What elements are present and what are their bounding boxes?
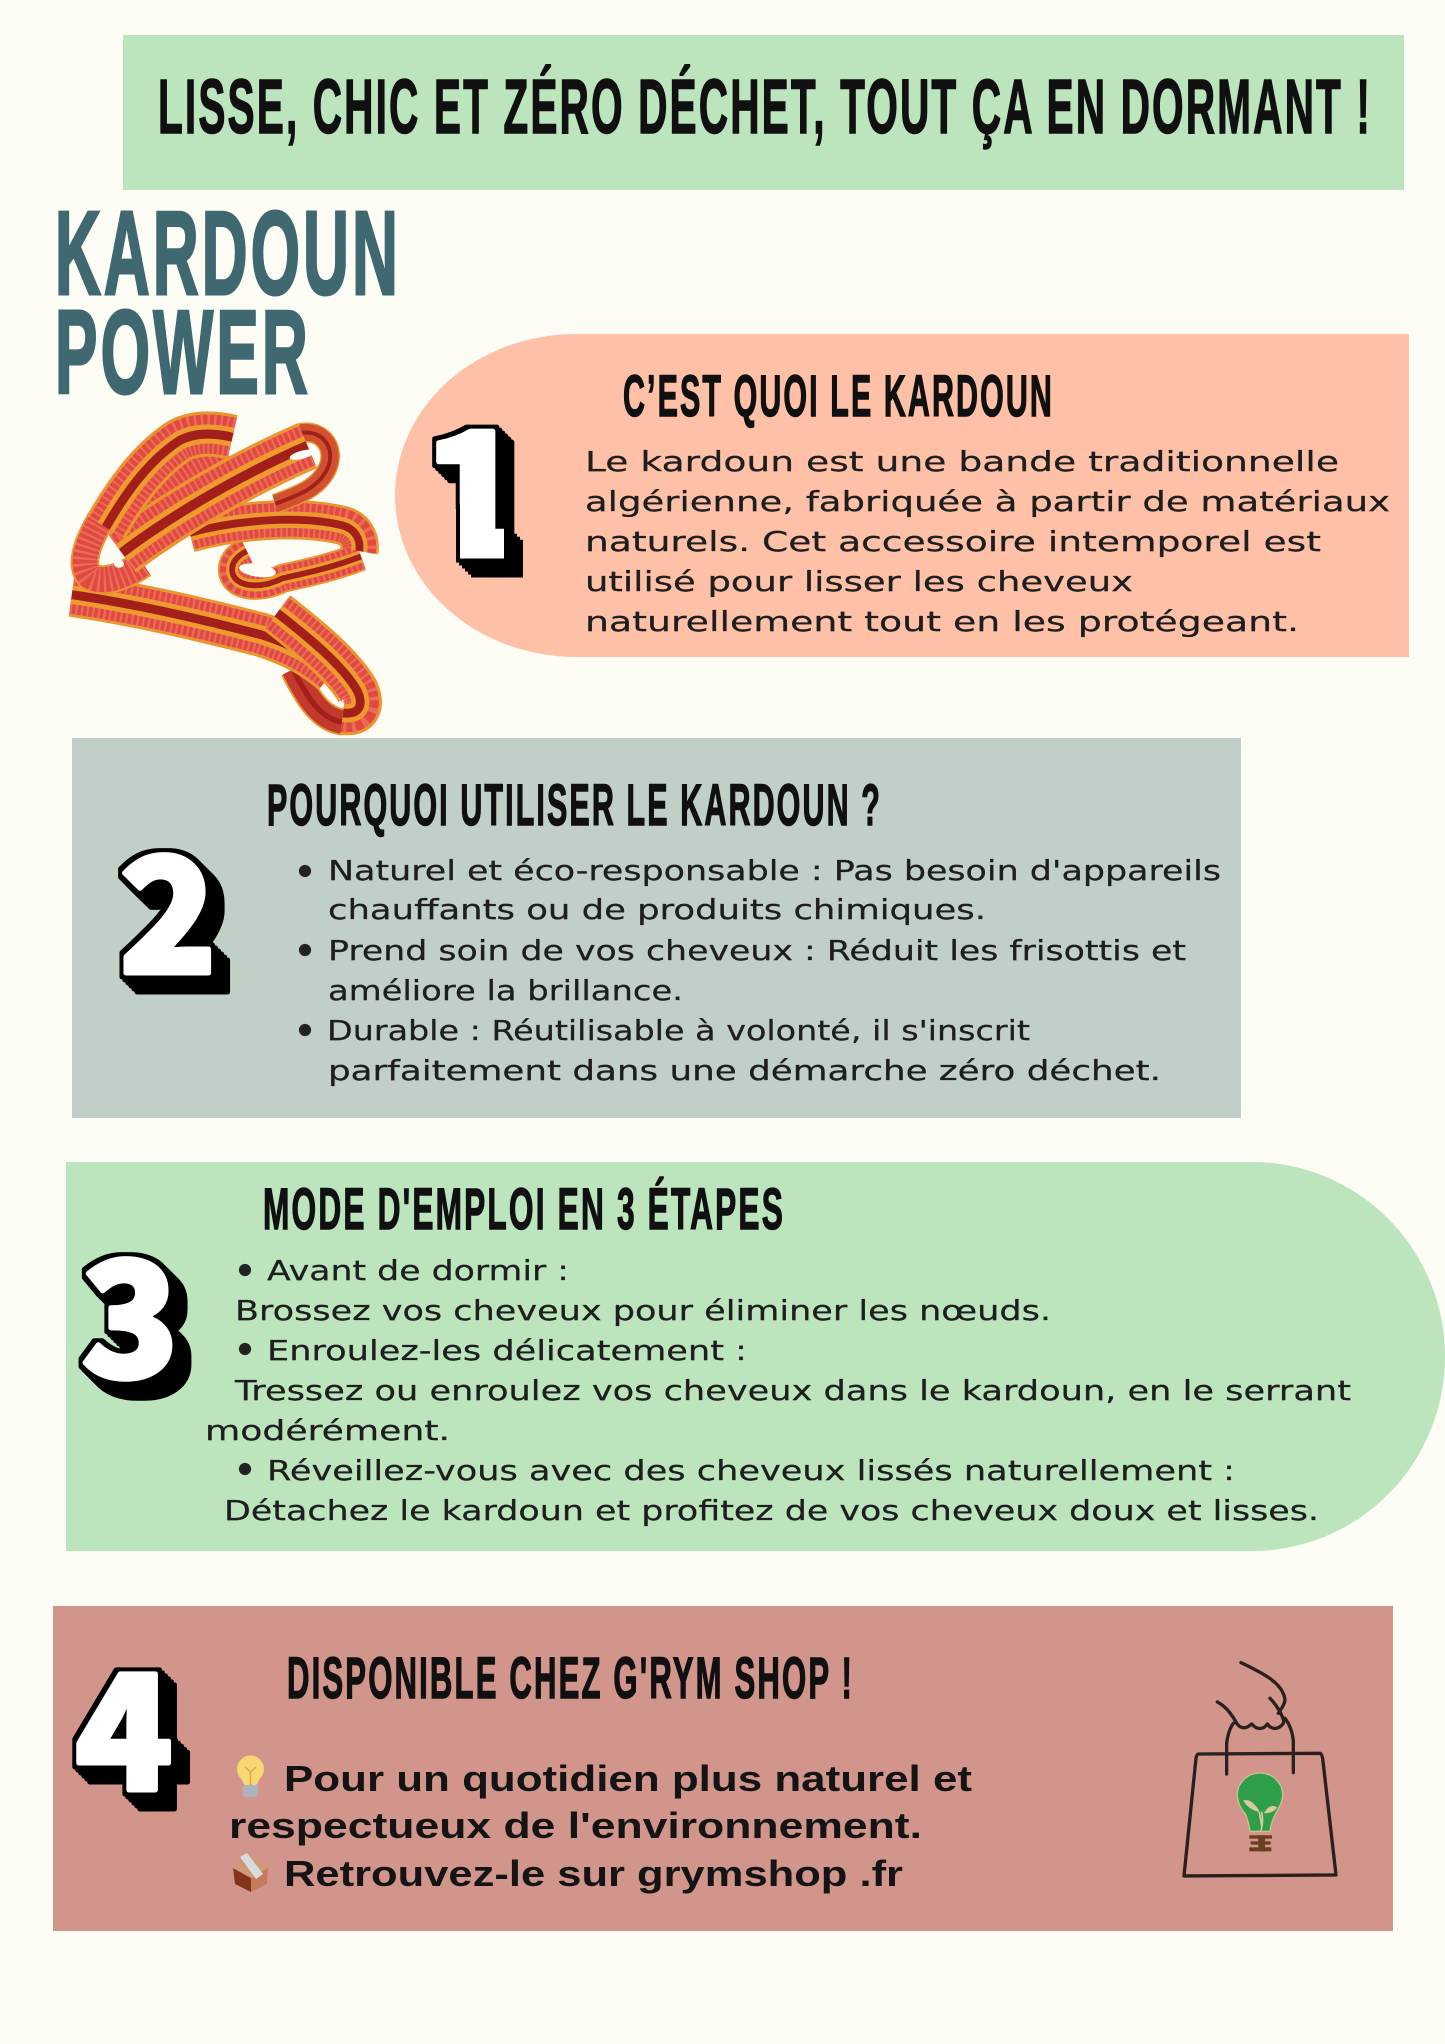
bullet list 2 [299, 854, 1221, 1087]
steps text: Détachez le kardoun et profitez de vos cheveux doux et lisses. [224, 1494, 1319, 1527]
body text 1: utilisé pour lisser les cheveux [585, 565, 1133, 598]
shop message: respectueux de l'environnement. [229, 1805, 922, 1846]
main title: KARDOUN [55, 187, 401, 320]
bullet list 2: chauffants ou de produits chimiques. [328, 893, 986, 926]
body text 1: Le kardoun est une bande traditionnelle [585, 445, 1339, 478]
heading 3: MODE D'EMPLOI EN 3 ÉTAPES [263, 1177, 785, 1242]
shop message: Retrouvez-le sur grymshop .fr [284, 1853, 903, 1894]
icon: shopping bag with hand and eco light bulb [1184, 1663, 1336, 1876]
body text 1 [585, 445, 1390, 638]
shop message [229, 1758, 972, 1894]
steps text: Enroulez-les délicatement : [267, 1334, 747, 1367]
bullet list 2: Naturel et éco-responsable : Pas besoin d'appareils [328, 854, 1221, 887]
heading 2: POURQUOI UTILISER LE KARDOUN ? [267, 773, 882, 838]
panel 2: why use kardoun [72, 738, 1241, 1118]
number 4: 4 [75, 1605, 173, 1837]
number 3: 3 [81, 1192, 179, 1424]
steps text: Réveillez-vous avec des cheveux lissés naturellement : [267, 1454, 1235, 1487]
heading 1: C’EST QUOI LE KARDOUN [623, 364, 1054, 429]
bullet list 2: Prend soin de vos cheveux : Réduit les frisottis et [328, 934, 1186, 967]
main title [55, 187, 401, 419]
steps text: Tressez ou enroulez vos cheveux dans le kardoun, en le serrant [234, 1374, 1351, 1407]
body text 1: algérienne, fabriquée à partir de matériaux [585, 485, 1390, 518]
main title: POWER [55, 286, 311, 419]
heading 4: DISPONIBLE CHEZ G'RYM SHOP ! [287, 1646, 854, 1711]
panel 1: what is kardoun [395, 334, 1409, 657]
steps text: Brossez vos cheveux pour éliminer les nœuds. [235, 1294, 1051, 1327]
number 1: 1 [422, 356, 526, 606]
kardoun ribbon illustration [72, 432, 361, 722]
number 2: 2 [119, 788, 217, 1020]
body text 1: naturels. Cet accessoire intemporel est [585, 525, 1321, 558]
shop message: Pour un quotidien plus naturel et [284, 1758, 972, 1799]
steps text: modérément. [205, 1414, 450, 1447]
steps text: Avant de dormir : [267, 1254, 569, 1287]
body text 1: naturellement tout en les protégeant. [585, 605, 1299, 638]
panel 3: how to use [66, 1162, 1445, 1551]
bullet list 2: parfaitement dans une démarche zéro déchet. [328, 1054, 1161, 1087]
top banner [123, 35, 1404, 190]
icon: light bulb emoji [237, 1756, 264, 1797]
bullet list 2: Durable : Réutilisable à volonté, il s'inscrit [327, 1014, 1030, 1047]
steps text [205, 1254, 1351, 1527]
bullet list 2: améliore la brillance. [328, 974, 683, 1007]
icon: package emoji [233, 1853, 268, 1892]
panel 4: available at G'RYM shop [53, 1605, 1393, 1931]
